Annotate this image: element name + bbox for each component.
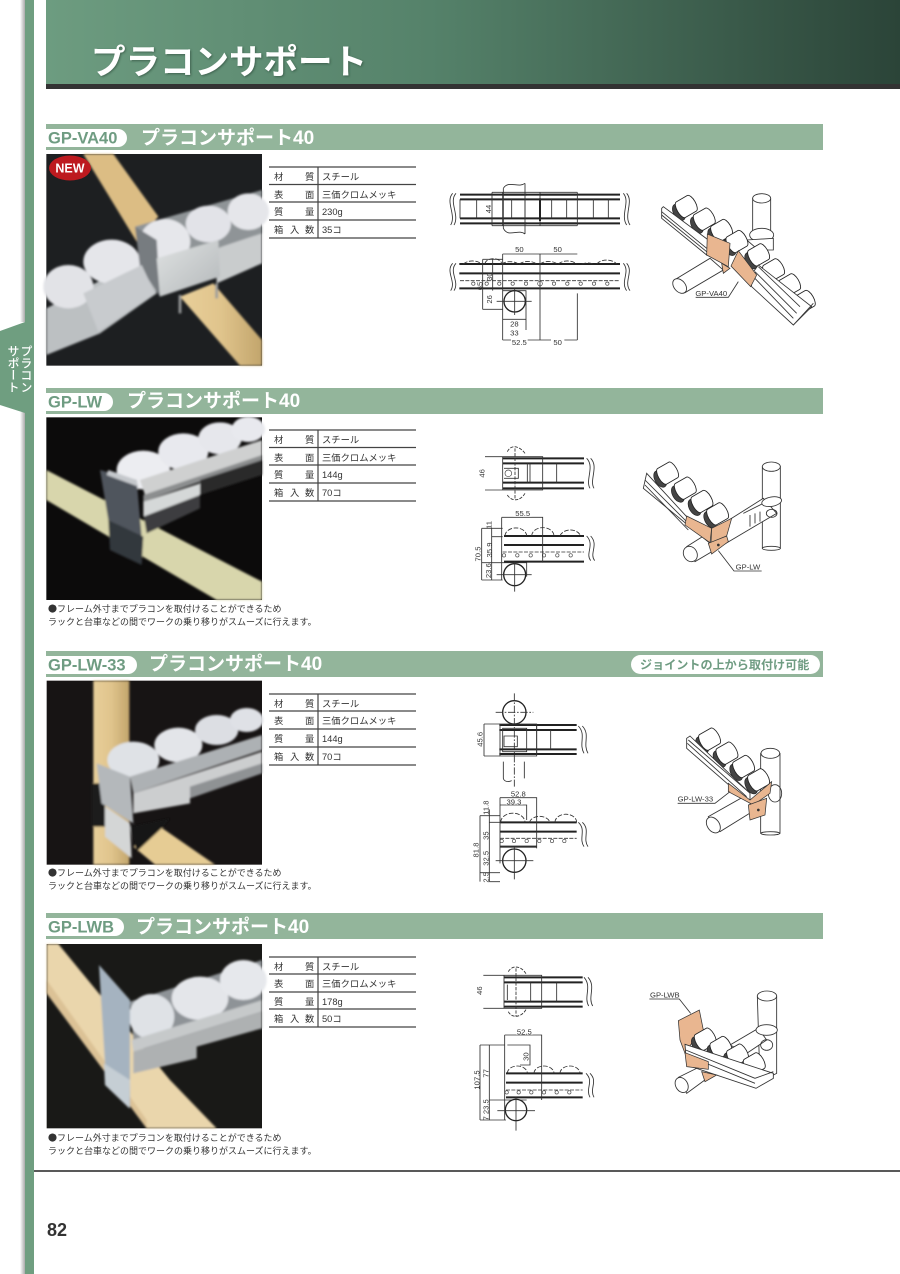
- dimension drawing: GP-LW-33: 32.5: [482, 851, 491, 866]
- dimension drawing: GP-VA40: [450, 183, 630, 347]
- spec table: GP-LW: 三価クロムメッキ: [322, 452, 396, 463]
- spec table: GP-LWB: 箱: [274, 1013, 283, 1024]
- dimension drawing: GP-LW: 70.5: [474, 547, 483, 561]
- dimension drawing: GP-LW: [474, 447, 595, 592]
- spec table: GP-LW: 入: [290, 488, 299, 498]
- page number: 82: [47, 1220, 67, 1240]
- spec table: GP-LW: 70コ: [322, 488, 342, 498]
- spec table: GP-LW-33: 質: [305, 698, 314, 709]
- section heading: GP-VA40: プラコンサポート40: [141, 126, 314, 149]
- spec table: GP-LW: スチール: [322, 435, 359, 445]
- title: プラコンサポート: [91, 44, 367, 82]
- spec table: GP-LWB: 178g: [322, 997, 343, 1007]
- isometric view: GP-VA40: GP-VA40: [695, 289, 727, 298]
- left page strip: [20, 0, 34, 1274]
- photo: GP-VA40: [43, 154, 269, 366]
- spec table: GP-LWB: 表: [274, 979, 283, 989]
- dimension drawing: GP-LWB: [472, 967, 594, 1131]
- side tab: category: プラコン: [19, 345, 33, 393]
- side tab: category: サポート: [6, 345, 20, 393]
- dimension drawing: GP-LW-33: 2.5: [482, 872, 491, 883]
- section heading: GP-LW-33: プラコンサポート40: [149, 652, 322, 675]
- spec table: GP-LWB: 材: [274, 961, 283, 972]
- spec table: GP-LWB: 質: [274, 996, 283, 1007]
- dimension drawing: GP-LWB: 30: [521, 1052, 530, 1061]
- dimension drawing: GP-LW-33: 39.3: [507, 798, 521, 807]
- feature note: GP-LWB: ●フレーム外寸までプラコンを取付けることができるため: [48, 1131, 282, 1144]
- spec table: GP-VA40: 量: [305, 207, 314, 217]
- dimension drawing: GP-LW: 46: [477, 469, 486, 478]
- photo: GP-LWB: [47, 944, 267, 1128]
- dimension drawing: GP-LW-33: [472, 693, 588, 883]
- badge: mountable over joint: [631, 655, 820, 674]
- dimension drawing: GP-LW-33: 45.6: [476, 732, 485, 747]
- spec table: GP-VA40: [269, 167, 416, 238]
- spec table: GP-LW-33: 面: [305, 716, 314, 726]
- spec table: GP-VA40: 三価クロムメッキ: [322, 189, 396, 200]
- isometric view: GP-LW-33: [678, 726, 782, 836]
- spec table: GP-LW: 144g: [322, 470, 343, 480]
- spec table: GP-LWB: 数: [305, 1013, 314, 1024]
- dimension drawing: GP-VA40: 50: [553, 245, 562, 254]
- spec table: GP-LWB: [269, 957, 416, 1027]
- section heading: GP-LWB: プラコンサポート40: [136, 915, 309, 938]
- spec table: GP-VA40: 入: [290, 225, 299, 235]
- spec table: GP-LW: [269, 430, 416, 501]
- dimension drawing: GP-LW-33: 35: [482, 831, 491, 840]
- section heading: GP-LW-33: GP-LW-33: [48, 656, 126, 674]
- section heading: GP-LW: GP-LW: [48, 394, 103, 412]
- dimension drawing: GP-LW: 11: [484, 521, 493, 529]
- spec table: GP-VA40: 箱: [274, 224, 283, 235]
- section heading: GP-LWB: [46, 913, 823, 939]
- dimension drawing: GP-LW-33: 52.8: [511, 790, 526, 799]
- spec table: GP-LWB: 量: [305, 997, 314, 1007]
- photo: GP-LW-33: [47, 681, 263, 865]
- spec table: GP-LW: 量: [305, 470, 314, 480]
- footer rule: [34, 1170, 900, 1172]
- spec table: GP-LWB: 50コ: [322, 1014, 342, 1024]
- dimension drawing: GP-LW: 35.9: [485, 543, 494, 557]
- spec table: GP-LW: 材: [274, 434, 283, 445]
- feature note: GP-LW: ラックと台車などの間でワークの乗り移りがスムーズに行えます。: [48, 615, 317, 628]
- spec table: GP-LW-33: 表: [274, 716, 283, 726]
- isometric view: GP-LW-33: GP-LW-33: [678, 795, 713, 804]
- dimension drawing: GP-VA40: 50: [553, 338, 562, 347]
- dimension drawing: GP-LW: 55.5: [515, 509, 530, 518]
- spec table: GP-LWB: 入: [290, 1014, 299, 1024]
- dimension drawing: GP-VA40: 44: [484, 204, 493, 213]
- photo: GP-LW: [46, 417, 265, 600]
- spec table: GP-LW-33: 三価クロムメッキ: [322, 715, 396, 726]
- spec table: GP-LW: 質: [305, 434, 314, 445]
- section heading: GP-LWB: GP-LWB: [48, 918, 114, 936]
- spec table: GP-LW: 箱: [274, 487, 283, 498]
- feature note: GP-LW-33: ●フレーム外寸までプラコンを取付けることができるため: [48, 866, 282, 879]
- spec table: GP-VA40: 質: [305, 171, 314, 182]
- dimension drawing: GP-LWB: 107.5: [472, 1070, 481, 1090]
- spec table: GP-VA40: 230g: [322, 207, 343, 217]
- dimension drawing: GP-LW-33: 81.8: [472, 843, 481, 857]
- side tab: category: [0, 322, 34, 413]
- dimension drawing: GP-VA40: 65: [476, 282, 485, 290]
- spec table: GP-LW-33: 材: [274, 698, 283, 709]
- isometric view: GP-VA40: [662, 194, 818, 325]
- dimension drawing: GP-VA40: 50: [515, 245, 524, 254]
- spec table: GP-LW: 数: [305, 487, 314, 498]
- isometric view: GP-LWB: [649, 991, 777, 1095]
- dimension drawing: GP-LWB: 7: [481, 1116, 490, 1120]
- spec table: GP-LW-33: 入: [290, 752, 299, 762]
- dimension drawing: GP-VA40: 30: [485, 272, 494, 281]
- dimension drawing: GP-LWB: 23.5: [481, 1099, 490, 1114]
- dimension drawing: GP-LW: 23.6: [484, 563, 493, 578]
- isometric view: GP-LW: [643, 460, 782, 571]
- spec table: GP-LW-33: 量: [305, 734, 314, 744]
- section heading: GP-LW-33: [46, 651, 823, 677]
- dimension drawing: GP-LWB: 52.5: [517, 1027, 532, 1036]
- NEW badge: NEW: [55, 162, 85, 176]
- dimension drawing: GP-LWB: 46: [475, 986, 484, 995]
- badge: mountable over joint: ジョイントの上から取付け可能: [640, 657, 809, 672]
- spec table: GP-VA40: 35コ: [322, 225, 342, 235]
- spec table: GP-LW-33: [269, 694, 416, 765]
- section heading: GP-LW: プラコンサポート40: [127, 389, 300, 412]
- dimension drawing: GP-VA40: 33: [510, 328, 519, 337]
- spec table: GP-LW-33: 箱: [274, 751, 283, 762]
- lower pipe: [674, 258, 723, 293]
- spec table: GP-LWB: スチール: [322, 962, 359, 972]
- spec table: GP-VA40: 質: [274, 206, 283, 217]
- spec table: GP-LW-33: 質: [274, 733, 283, 744]
- spec table: GP-LWB: 質: [305, 961, 314, 972]
- dimension drawing: GP-VA40: 28: [510, 320, 519, 329]
- spec table: GP-LW: 質: [274, 469, 283, 480]
- spec table: GP-LWB: 三価クロムメッキ: [322, 978, 396, 989]
- spec table: GP-VA40: 面: [305, 190, 314, 200]
- isometric view: GP-LW: GP-LW: [736, 562, 761, 571]
- section heading: GP-LW: [46, 388, 823, 414]
- spec table: GP-VA40: 数: [305, 224, 314, 235]
- feature note: GP-LWB: ラックと台車などの間でワークの乗り移りがスムーズに行えます。: [48, 1144, 317, 1157]
- feature note: GP-LW: ●フレーム外寸までプラコンを取付けることができるため: [48, 602, 282, 615]
- dimension drawing: GP-VA40: 52.5: [512, 338, 527, 347]
- NEW badge: [49, 156, 91, 180]
- page header band: [46, 0, 900, 89]
- dimension drawing: GP-LWB: 77: [481, 1069, 490, 1078]
- spec table: GP-LW-33: スチール: [322, 699, 359, 709]
- feature note: GP-LWB: [48, 1131, 317, 1157]
- spec table: GP-LW: 面: [305, 453, 314, 463]
- feature note: GP-LW-33: ラックと台車などの間でワークの乗り移りがスムーズに行えます。: [48, 879, 317, 892]
- feature note: GP-LW: [48, 602, 317, 628]
- spec table: GP-LW-33: 70コ: [322, 752, 342, 762]
- spec table: GP-VA40: 材: [274, 171, 283, 182]
- feature note: GP-LW-33: [48, 866, 317, 892]
- spec table: GP-LW: 表: [274, 453, 283, 463]
- spec table: GP-VA40: スチール: [322, 172, 359, 182]
- spec table: GP-VA40: 表: [274, 190, 283, 200]
- spec table: GP-LWB: 面: [305, 979, 314, 989]
- dimension drawing: GP-LW-33: 11.8: [482, 800, 491, 815]
- spec table: GP-LW-33: 144g: [322, 734, 343, 744]
- section heading: GP-VA40: [46, 124, 823, 150]
- spec table: GP-LW-33: 数: [305, 751, 314, 762]
- section heading: GP-VA40: GP-VA40: [48, 130, 117, 148]
- dimension drawing: GP-VA40: 26: [485, 295, 494, 304]
- isometric view: GP-LWB: GP-LWB: [650, 991, 680, 1000]
